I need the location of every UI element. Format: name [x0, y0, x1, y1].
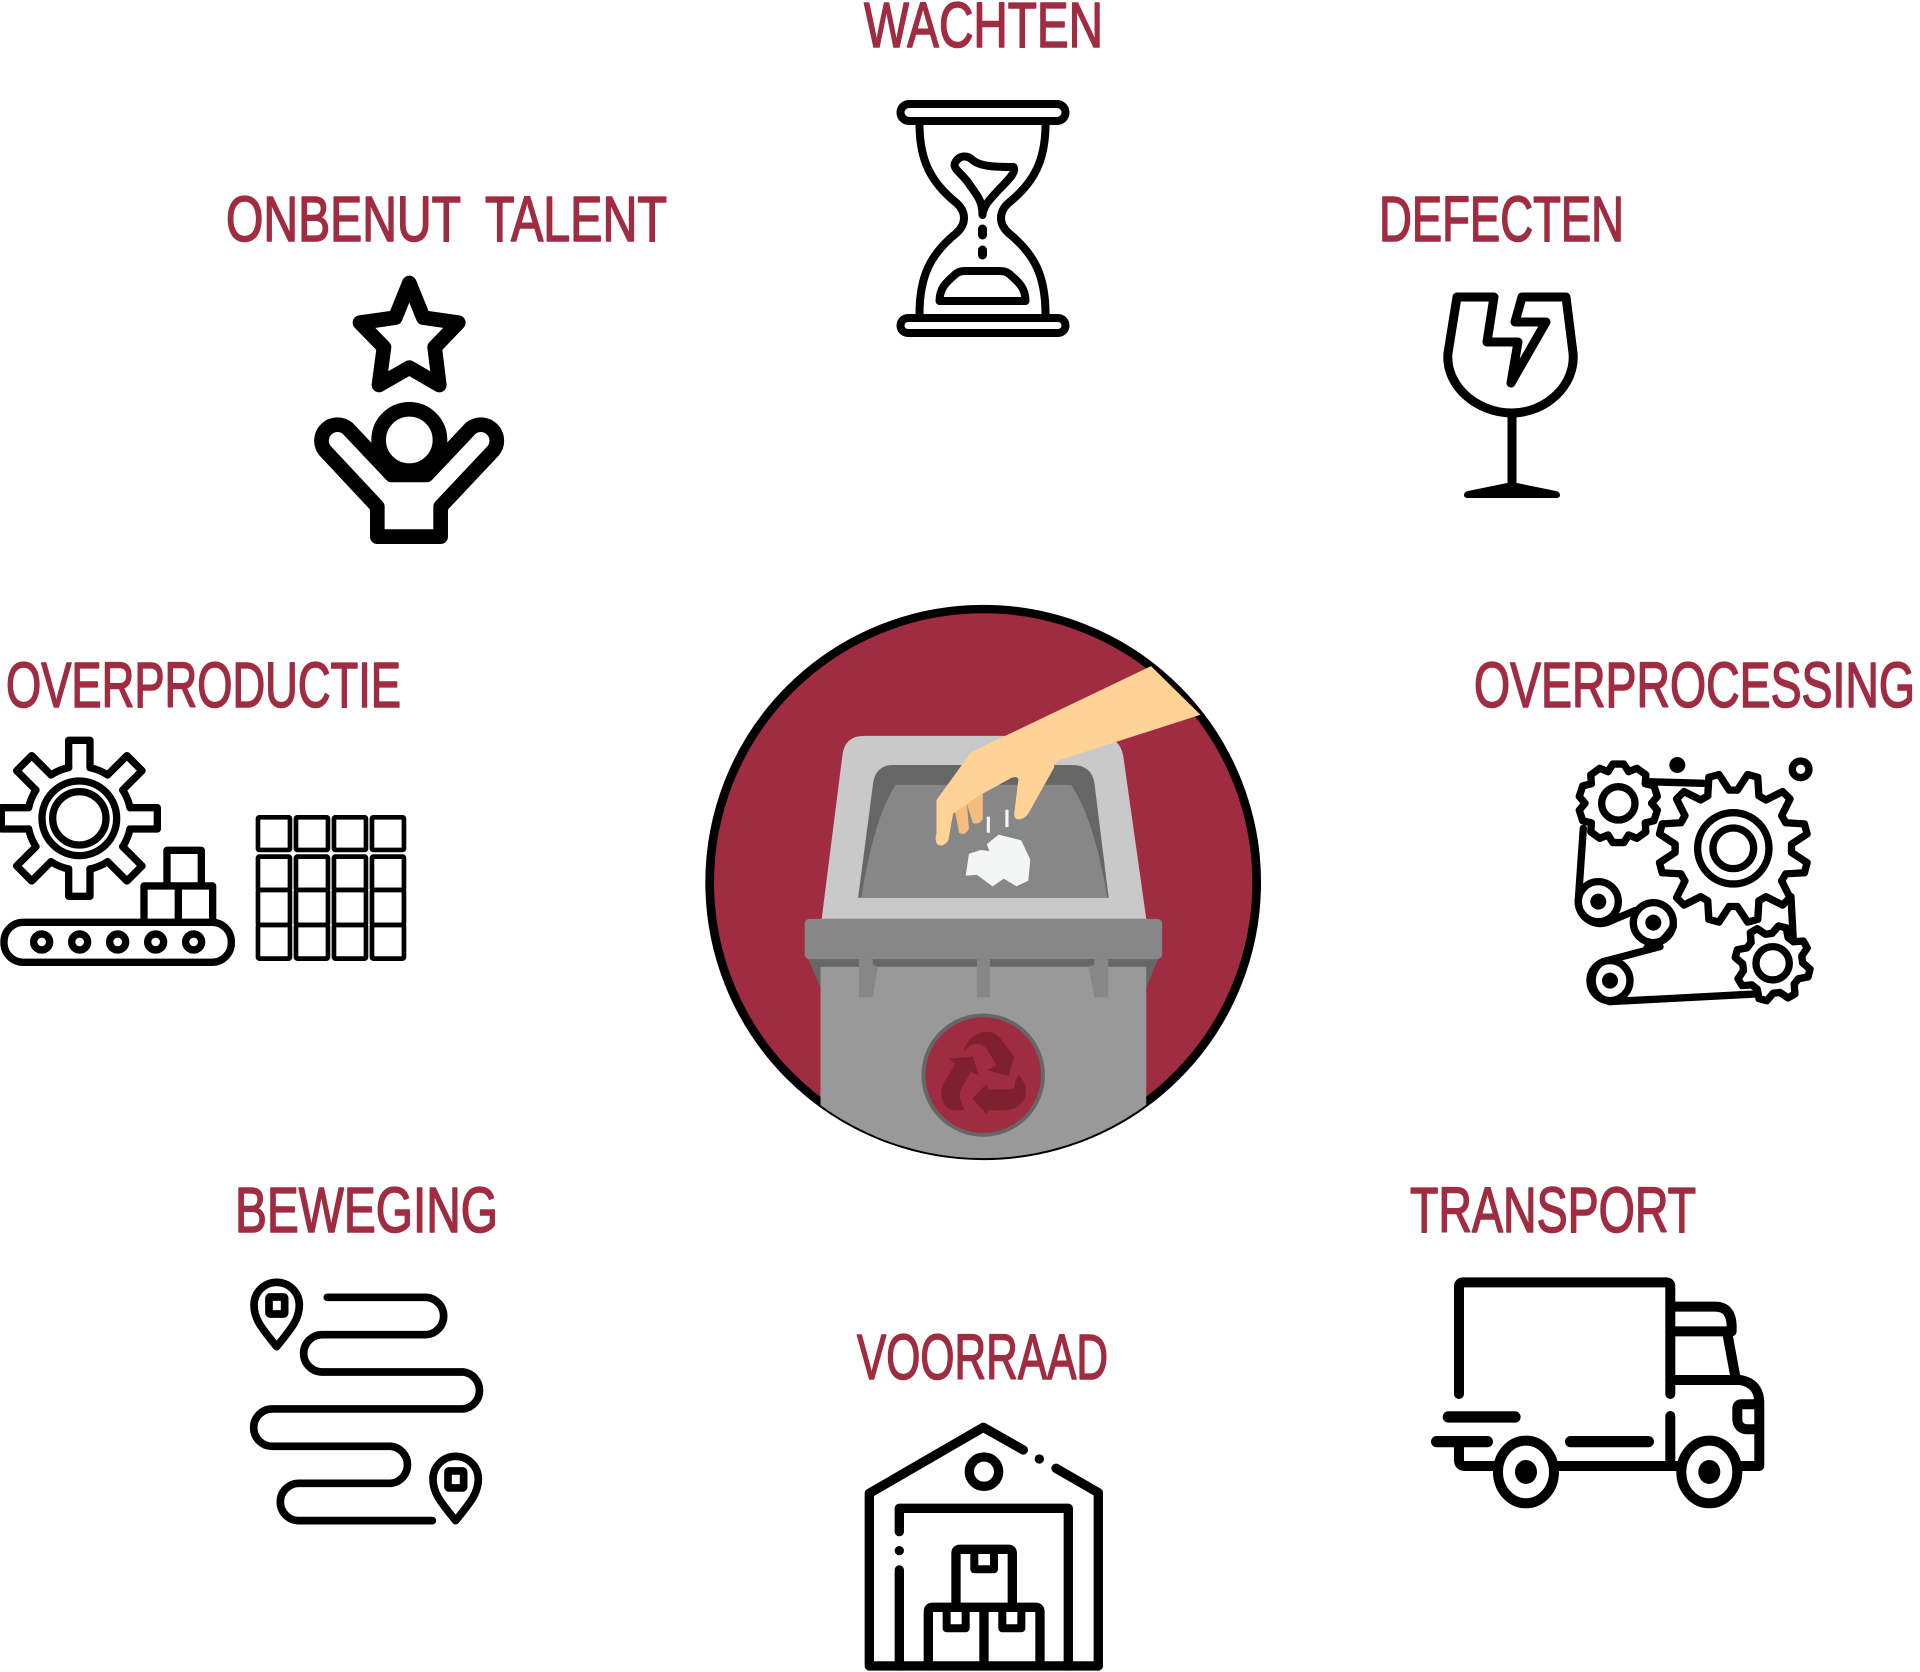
recycling symbol — [923, 1015, 1043, 1135]
label: ONBENUT TALENT: TALENT — [485, 183, 667, 255]
label: DEFECTEN: DEFECTEN — [1379, 183, 1624, 255]
icon: gear, conveyor and stock grid — [1, 740, 404, 962]
label: TRANSPORT: TRANSPORT — [1410, 1174, 1696, 1246]
icon: delivery truck — [1437, 1282, 1759, 1503]
label: OVERPRODUCTIE: OVERPRODUCTIE — [6, 649, 401, 721]
icon: gears and belts — [1578, 757, 1813, 1003]
icon: hourglass — [900, 104, 1066, 333]
crumpled paper — [966, 835, 1030, 886]
icon: person with star — [322, 283, 497, 537]
label: ONBENUT TALENT: ONBENUT — [226, 183, 461, 255]
red circle with black outline — [710, 609, 1257, 1156]
bin — [805, 736, 1162, 1162]
icon: broken glass — [1448, 297, 1573, 498]
icon: warehouse with boxes — [869, 1427, 1098, 1666]
label: VOORRAAD: VOORRAAD — [857, 1321, 1108, 1393]
illustration: hand dropping paper in recycling bin — [710, 609, 1257, 1162]
label: BEWEGING: BEWEGING — [235, 1174, 498, 1246]
icon: winding route with pins — [254, 1282, 479, 1521]
motion lines — [987, 810, 1009, 833]
hand — [936, 666, 1200, 845]
